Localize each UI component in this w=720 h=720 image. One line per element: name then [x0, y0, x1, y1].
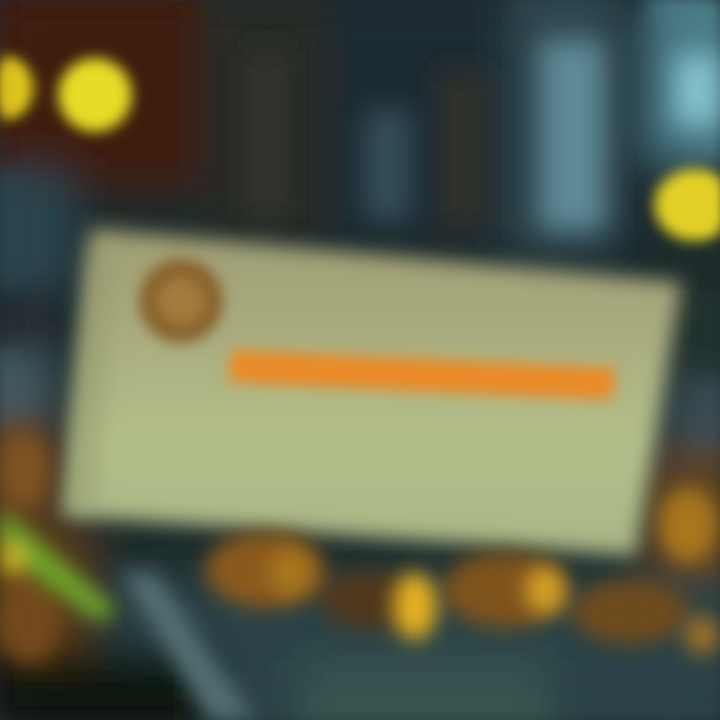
- icon: yellow light left edge: [0, 56, 34, 120]
- green streak: [0, 510, 118, 622]
- coins row: [0, 432, 720, 664]
- icon: yellow light right edge: [654, 169, 720, 241]
- icon: yellow light: [58, 58, 132, 132]
- panel: blurred card: [62, 228, 682, 556]
- card left edge shading: [68, 250, 118, 510]
- icon: round seal: [139, 259, 223, 343]
- orange banner: [228, 350, 616, 400]
- cloth fold: [120, 572, 255, 720]
